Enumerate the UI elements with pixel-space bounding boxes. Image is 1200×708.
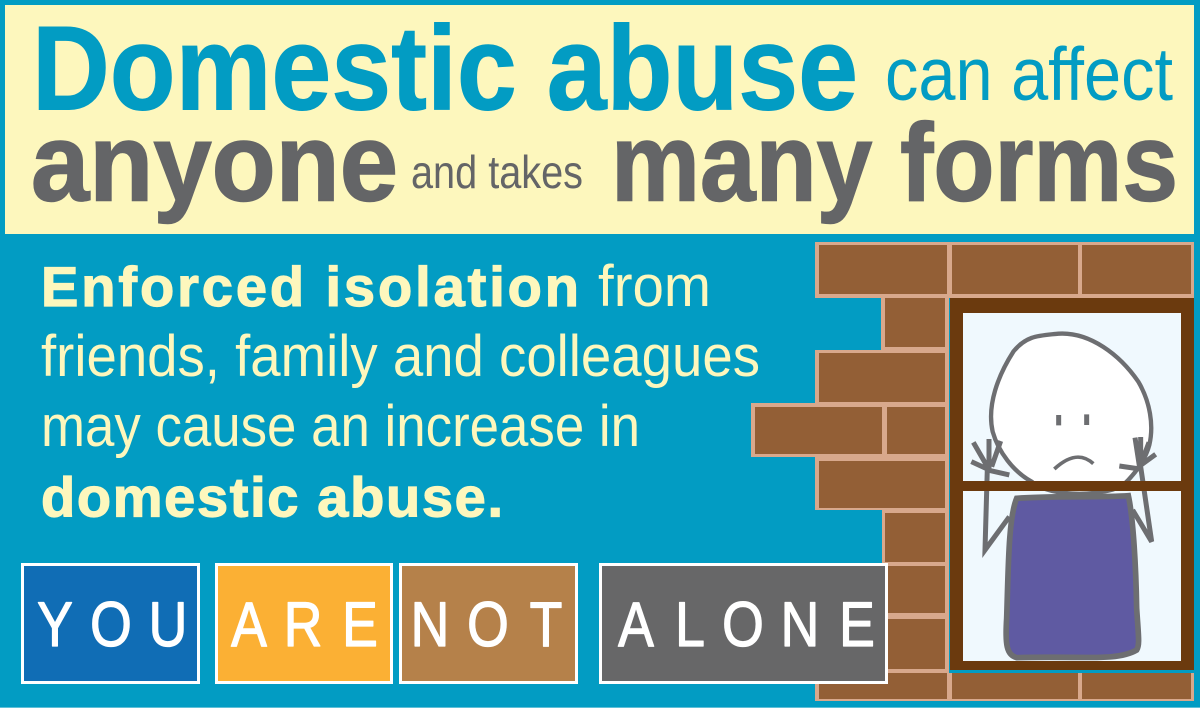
line: Enforced isolation from: Enforced isolation — [41, 255, 579, 318]
line: domestic abuse.: domestic abuse. — [41, 466, 503, 528]
line: friends, family and colleagues: friends, family and colleagues — [41, 324, 760, 389]
heading: Domestic abuse: Domestic abuse — [32, 2, 858, 136]
line: Enforced isolation from: from — [598, 254, 711, 319]
right arm and hand — [1119, 437, 1156, 542]
heading: anyone: anyone — [31, 102, 398, 224]
badge: NOT — [400, 564, 576, 682]
window frame and glass — [950, 298, 1194, 670]
left arm and hand — [971, 439, 1009, 550]
figure body — [1006, 496, 1139, 658]
window mullion — [963, 481, 1181, 491]
panel: headline banner — [5, 2, 1194, 234]
line: may cause an increase in: may cause an increase in — [41, 394, 640, 459]
badge: NOT: NOT — [411, 590, 562, 660]
badge: ALONE — [600, 564, 886, 682]
figure mouth — [1054, 457, 1093, 469]
brick wall — [751, 242, 1194, 701]
heading: and takes: and takes — [411, 146, 583, 198]
window with sad figure — [950, 298, 1194, 670]
text block: enforced isolation message — [41, 254, 760, 528]
badge: ALONE: ALONE — [618, 590, 875, 660]
figure eyes — [1059, 414, 1087, 425]
badge: ARE: ARE — [231, 590, 378, 660]
badge: YOU: YOU — [37, 590, 187, 660]
badge: YOU — [22, 564, 198, 682]
figure head — [991, 334, 1151, 494]
sad stick figure — [971, 334, 1156, 658]
heading: can affect: can affect — [885, 32, 1173, 116]
badge: ARE — [216, 564, 392, 682]
